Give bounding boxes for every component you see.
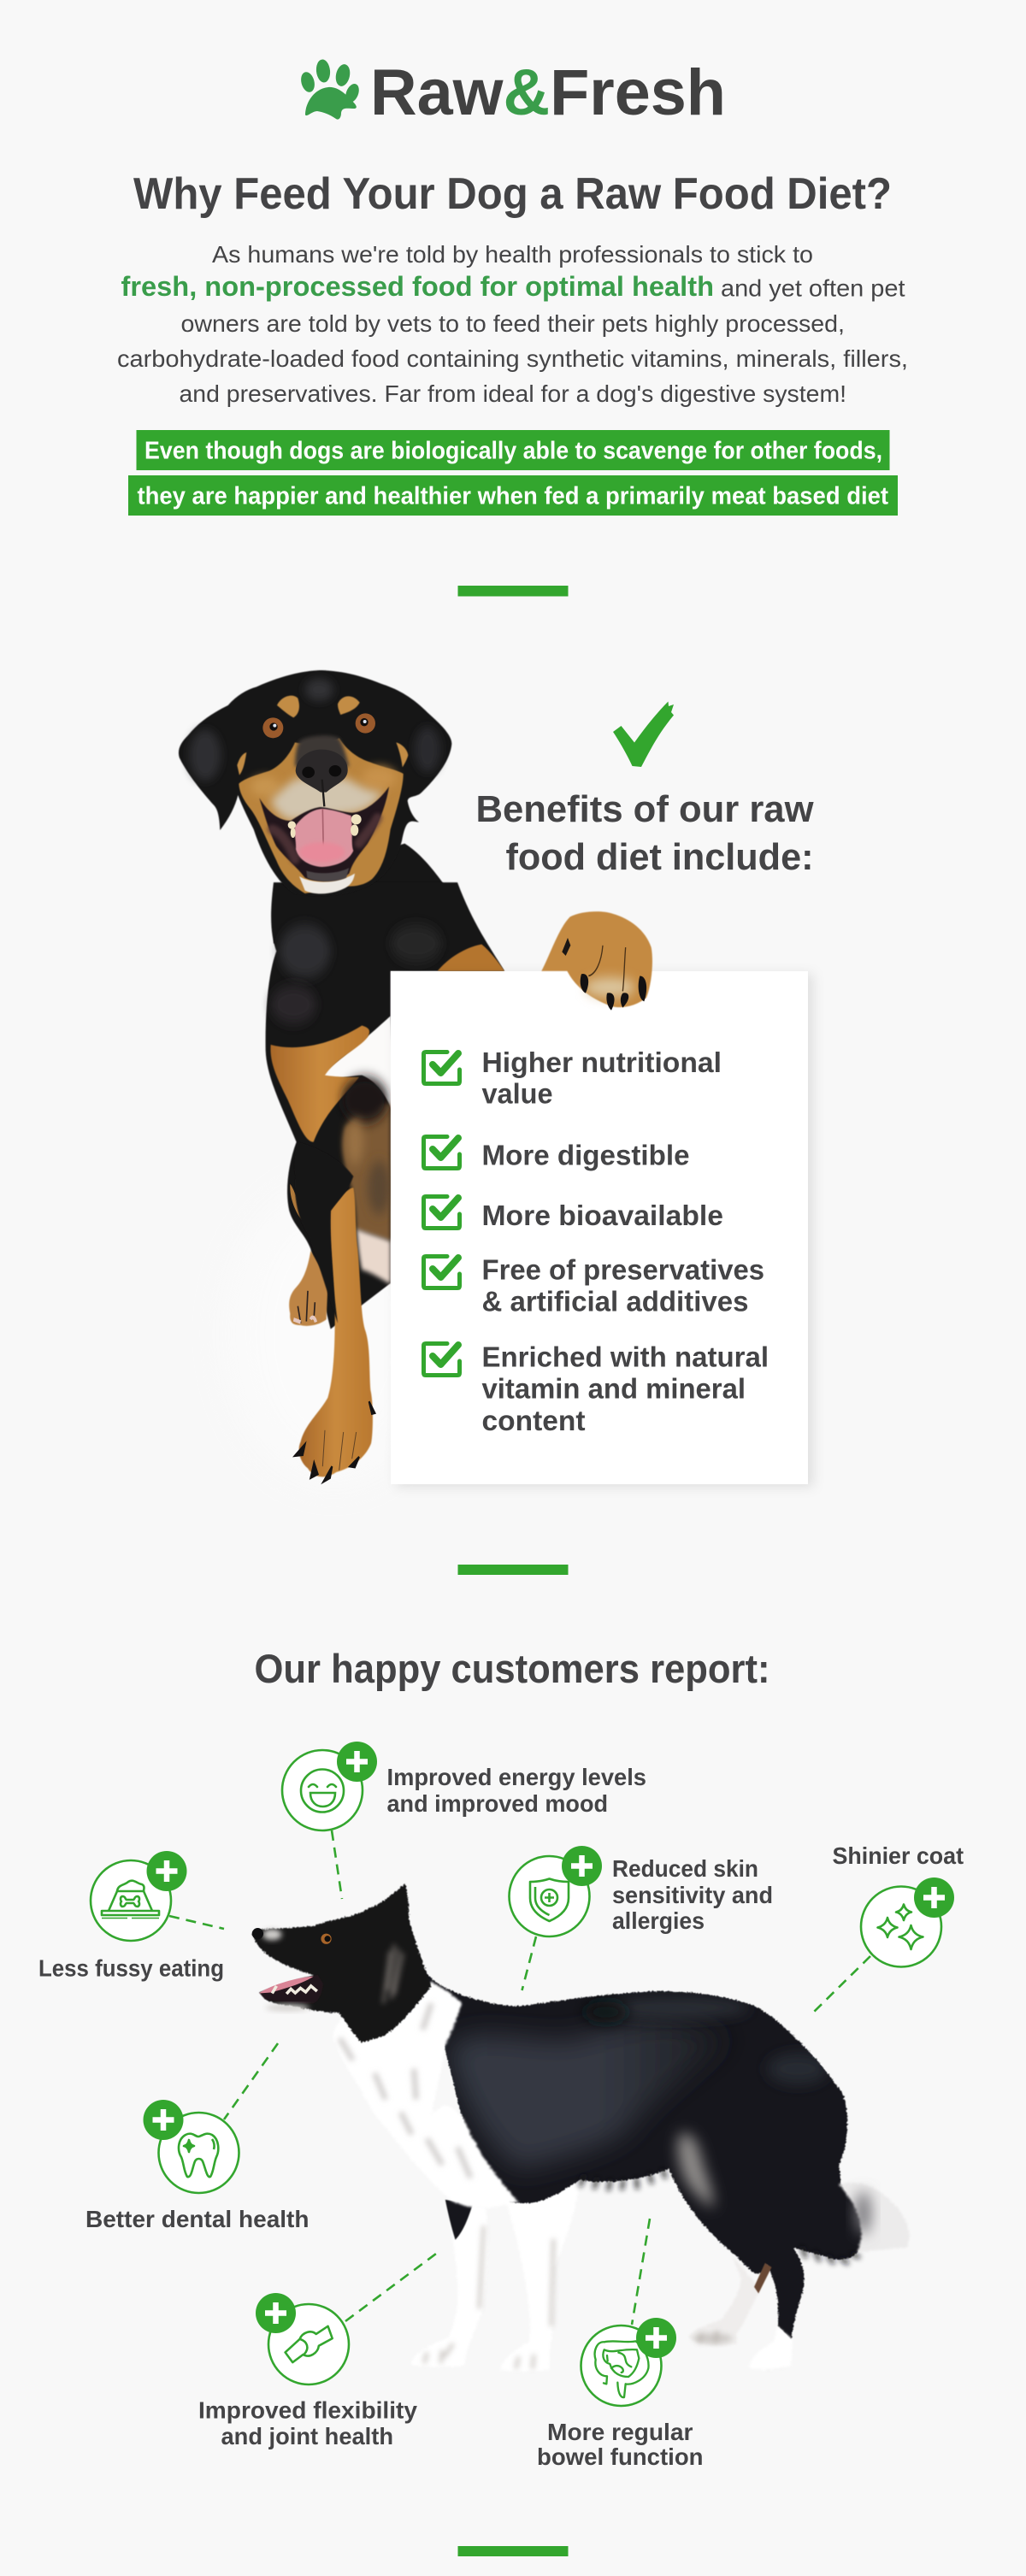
benefit: free of preservatives: & artificial additives	[482, 1286, 749, 1317]
panel: benefits list card	[391, 971, 808, 1484]
hind paw	[289, 1251, 327, 1326]
head and ears	[179, 670, 451, 896]
chin	[299, 874, 355, 893]
mouth	[259, 787, 389, 881]
benefit: higher nutritional value: value	[482, 1077, 552, 1110]
label: reduced skin sensitivity: Reduced skin	[612, 1855, 758, 1882]
white chest	[321, 1016, 393, 1115]
intro paragraph: owners are told by vets to to feed their pets highly processed,	[181, 310, 845, 337]
icon: big brush check mark	[613, 701, 674, 767]
intro paragraph: and preservatives. Far from ideal for a dog's digestive system!	[180, 380, 846, 407]
chest fur shading	[339, 2003, 470, 2178]
far rear leg	[689, 2256, 761, 2345]
near rear foot	[749, 2326, 793, 2370]
hind leg tan	[290, 1184, 304, 1222]
callout: highlighted statement: they are happier and healthier when fed a primarily meat based diet	[137, 482, 888, 510]
label: regular bowel function: bowel function	[537, 2443, 703, 2470]
tan muzzle	[239, 738, 404, 893]
benefit: enriched with vitamins: content	[482, 1405, 585, 1436]
icon group: better dental health	[144, 2100, 239, 2193]
label: less fussy eating: Less fussy eating	[38, 1954, 224, 1982]
body	[422, 1968, 868, 2339]
label: reduced skin sensitivity: allergies	[612, 1907, 705, 1934]
ruff fur	[383, 1944, 403, 2003]
benefit: higher nutritional value: Higher nutritional	[482, 1046, 722, 1078]
benefit: more bioavailable: More bioavailable	[482, 1200, 723, 1231]
tail tip	[840, 2183, 910, 2252]
callout: highlighted statement	[128, 430, 898, 516]
heading: benefits	[475, 788, 814, 878]
cheek marks	[237, 752, 246, 775]
heading: benefits: Benefits of our raw	[475, 788, 814, 830]
label: improved energy: and improved mood	[386, 1790, 608, 1817]
eyes	[262, 717, 283, 738]
mouth	[259, 1975, 323, 2003]
label: reduced skin sensitivity: sensitivity and	[612, 1882, 773, 1908]
fur sheen	[280, 924, 331, 978]
label: improved energy	[386, 1764, 646, 1817]
illustration: sitting dog head	[179, 670, 451, 896]
benefit: enriched with vitamins: vitamin and mineral	[482, 1373, 746, 1404]
nose bridge	[295, 735, 349, 767]
muzzle patch	[262, 1929, 281, 1940]
label: flexibility and joint health: and joint health	[221, 2423, 393, 2449]
barrel sheen	[449, 1997, 828, 2208]
illustration: paw over the card	[541, 911, 652, 1011]
toe lines and nails	[322, 1430, 357, 1471]
fur fringe	[581, 2170, 858, 2263]
benefit: higher nutritional value	[424, 1046, 722, 1110]
icon group: reduced skin sensitivity	[510, 1846, 602, 1936]
icon group: less fussy eating	[91, 1851, 186, 1941]
logo wordmark: Raw&Fresh	[370, 56, 726, 129]
belly	[357, 1229, 391, 1284]
intro paragraph: and yet often pet	[721, 275, 905, 301]
illustration: sitting dog neck	[274, 844, 456, 943]
nails	[581, 974, 646, 1011]
front leg	[299, 1188, 373, 1477]
heading: happy customers: Our happy customers report:	[255, 1646, 770, 1691]
benefit: enriched with vitamins: Enriched with natural	[482, 1341, 769, 1373]
white chest	[333, 1982, 519, 2208]
fur sheen	[190, 729, 221, 781]
icon group: flexibility and joint health	[256, 2293, 349, 2384]
benefit: free of preservatives	[424, 1253, 764, 1317]
illustration: sitting dog body	[266, 882, 504, 1482]
icon: paw	[299, 59, 362, 120]
label: improved energy: Improved energy levels	[386, 1764, 646, 1790]
label: reduced skin sensitivity	[612, 1855, 773, 1934]
tan shoulder	[270, 1026, 369, 1142]
eyebrows	[277, 696, 299, 717]
label: better dental health: Better dental health	[86, 2206, 310, 2232]
benefit: free of preservatives: Free of preservatives	[482, 1253, 764, 1286]
logo: Raw&Fresh	[299, 56, 726, 129]
intro paragraph: As humans we're told by health professionals to stick to	[212, 241, 813, 268]
tongue	[295, 809, 353, 867]
intro paragraph: fresh, non-processed food for optimal health	[121, 271, 714, 302]
title: Why Feed Your Dog a Raw Food Diet?	[133, 169, 892, 219]
pale muzzle	[271, 778, 383, 821]
brown inner thigh	[754, 2263, 771, 2294]
connector lines	[169, 1830, 870, 2325]
teeth	[288, 814, 362, 838]
icon group: shinier coat	[861, 1877, 954, 1966]
benefit: more digestible: More digestible	[482, 1139, 689, 1171]
icon group: regular bowel function	[581, 2318, 676, 2406]
intro paragraph	[117, 241, 908, 407]
illustration: standing border collie	[252, 1883, 910, 2372]
label: shinier coat: Shinier coat	[833, 1842, 964, 1869]
near front leg	[500, 2182, 580, 2372]
leg and paw shading	[424, 2225, 781, 2369]
label: regular bowel function: More regular	[547, 2419, 693, 2445]
far front leg	[410, 2200, 487, 2367]
floor glow beneath sitting dog	[231, 1188, 436, 1479]
shoulder tan right	[438, 944, 504, 971]
icon group: improved energy	[282, 1742, 377, 1830]
heading: benefits: food diet include:	[506, 836, 814, 878]
callout: highlighted statement: Even though dogs are biologically able to scavenge for other foods,	[144, 438, 882, 465]
eye	[321, 1934, 332, 1944]
haunch	[342, 1103, 391, 1241]
head	[252, 1883, 431, 2043]
nose	[296, 750, 348, 793]
black stripe on leg	[294, 1142, 353, 1323]
label: flexibility and joint health: Improved flexibility	[198, 2397, 417, 2423]
benefit: enriched with vitamins	[424, 1341, 769, 1436]
label: regular bowel function	[537, 2419, 703, 2470]
label: flexibility and joint health	[198, 2397, 417, 2449]
intro paragraph: carbohydrate-loaded food containing synthetic vitamins, minerals, fillers,	[117, 345, 908, 372]
